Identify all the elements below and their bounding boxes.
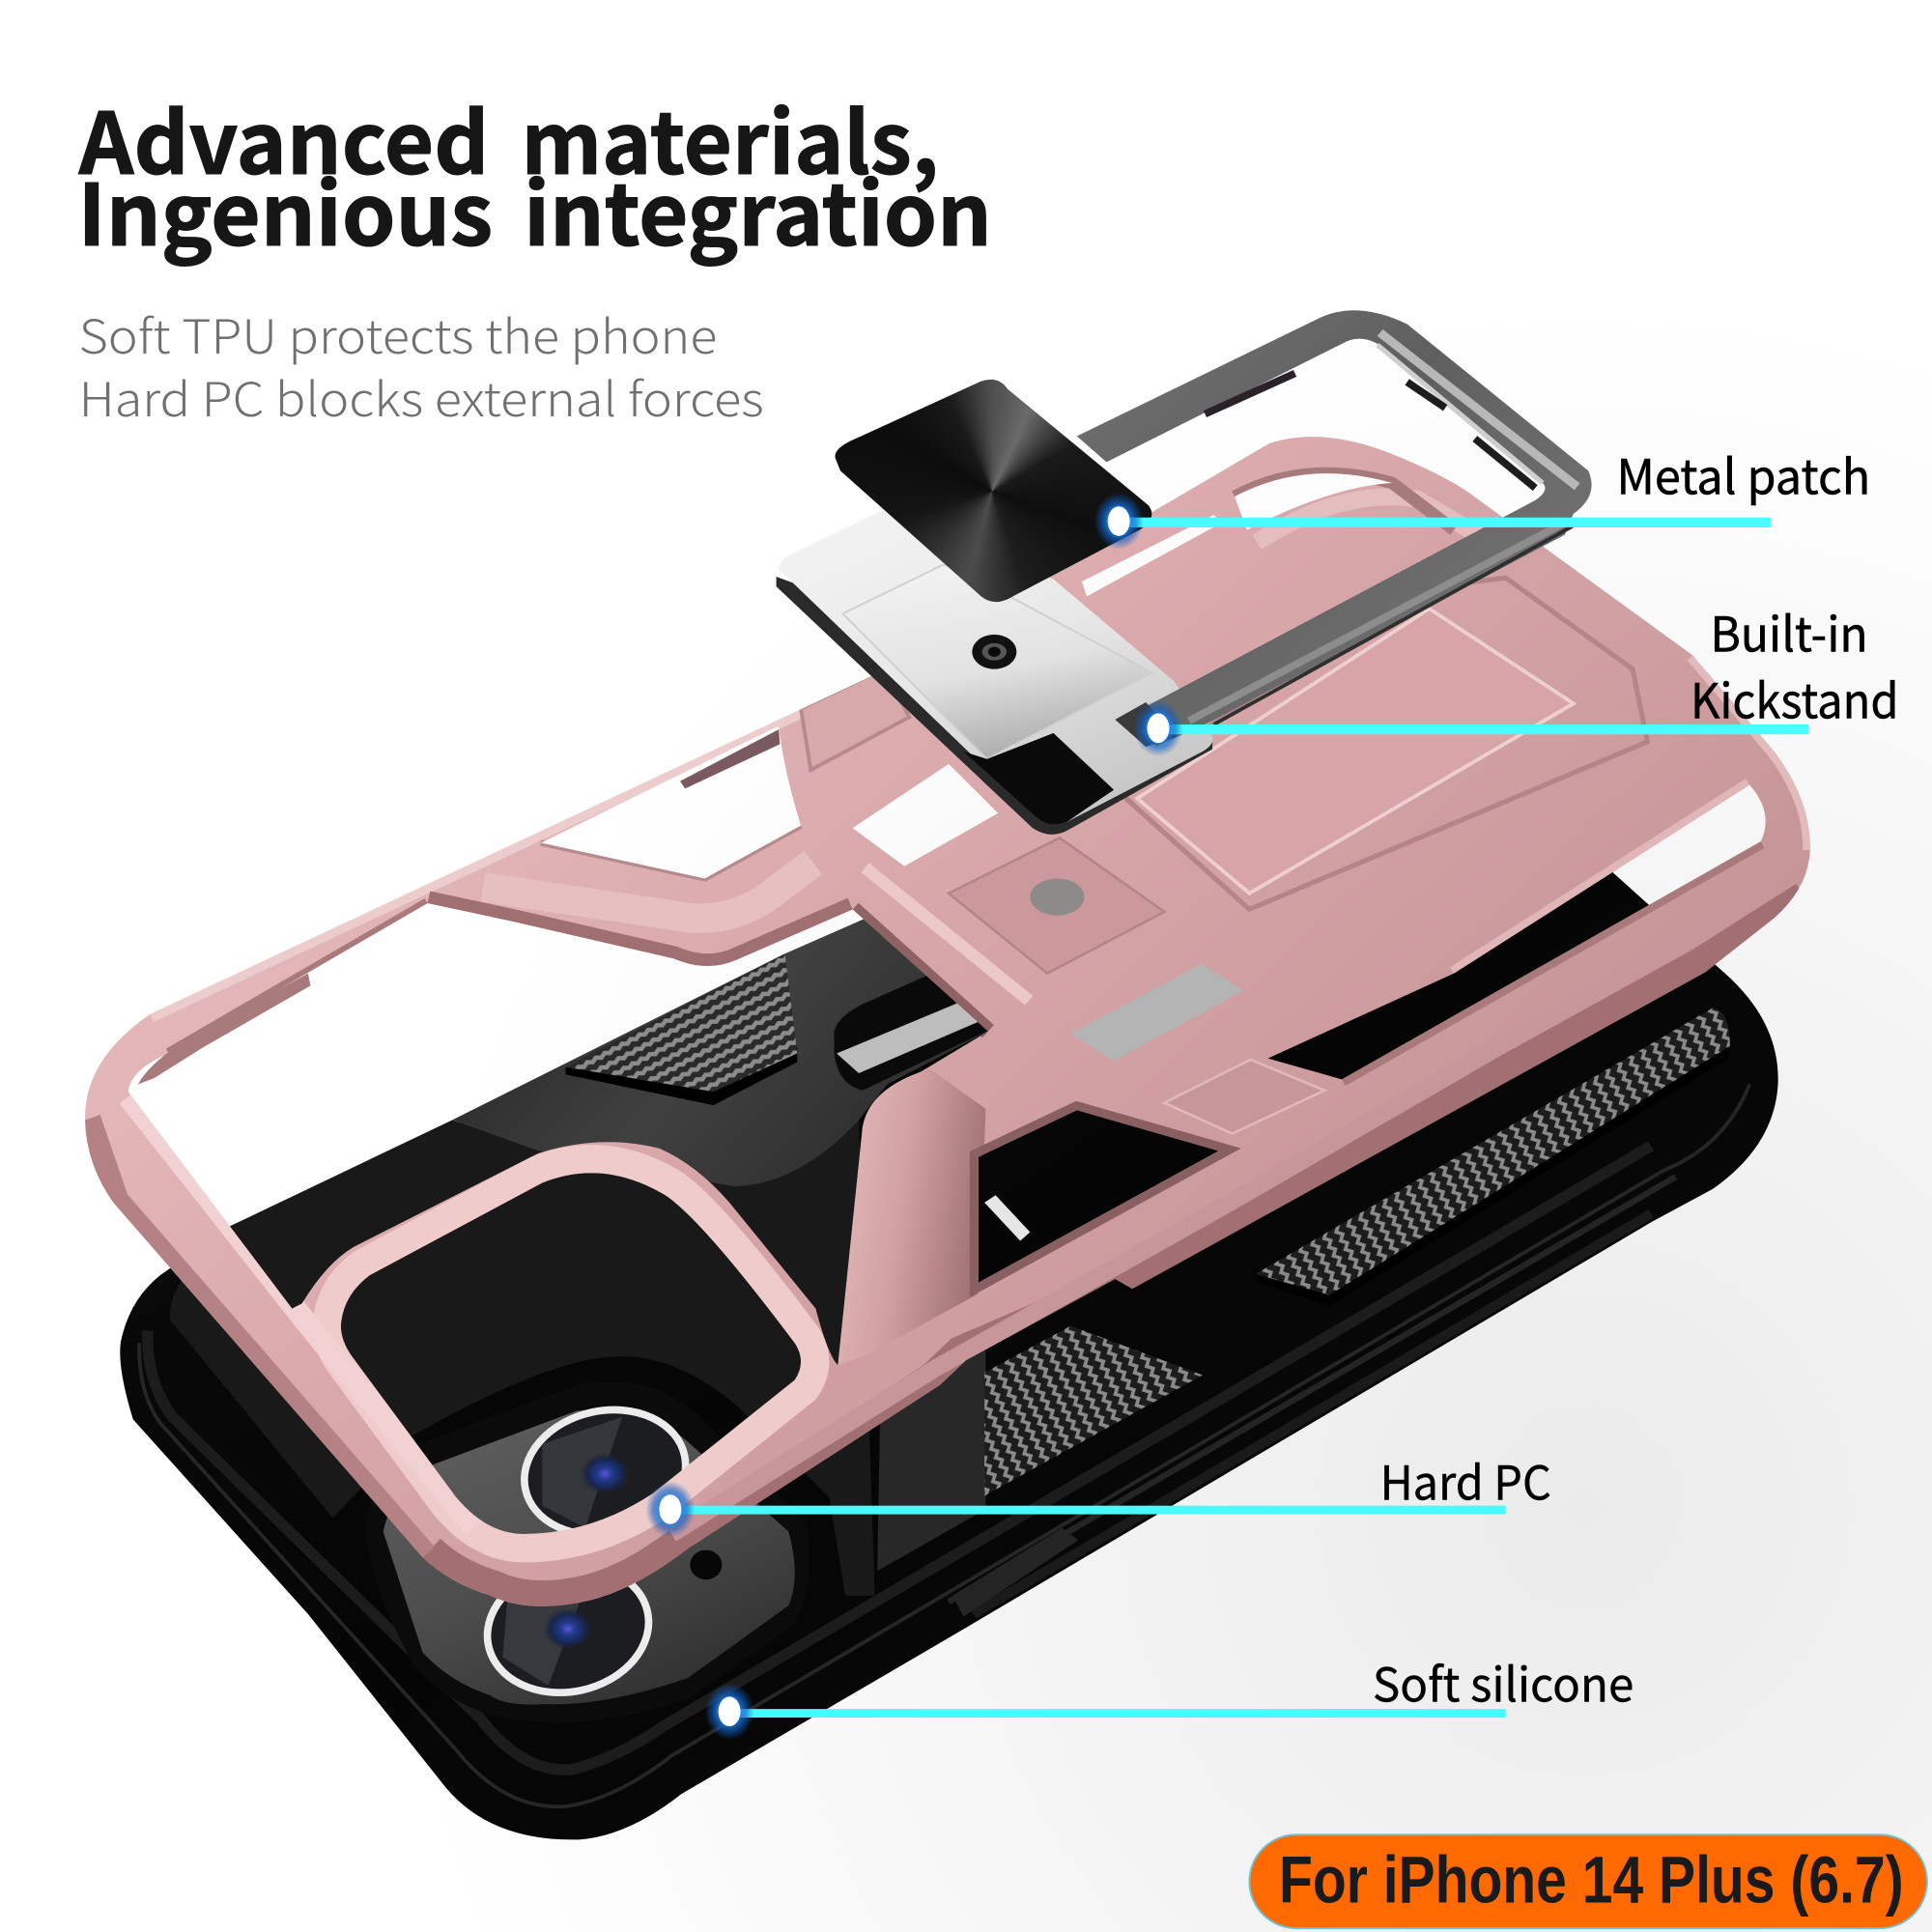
plate black reflection — [963, 733, 1114, 825]
arm socket — [1115, 702, 1177, 747]
metal patch — [835, 379, 1151, 603]
phone case: soft silicone black body — [120, 727, 1778, 1839]
frame lip: triangular opening — [680, 729, 780, 788]
square recess — [949, 838, 1164, 974]
frame shading — [85, 473, 1810, 1606]
title: materials, — [522, 76, 939, 199]
lower lens — [475, 1550, 661, 1707]
callout: soft silicone — [705, 1647, 1634, 1740]
subtitle — [79, 299, 764, 430]
center screw — [972, 635, 1016, 669]
title: Advanced — [78, 76, 489, 199]
kickstand recess — [1137, 609, 1574, 894]
carbon patch: triangle — [984, 1325, 1203, 1495]
gray reflection window — [1060, 949, 1257, 1072]
subtitle: Soft TPU protects the phone — [79, 299, 717, 367]
frame lip: top-left opening — [138, 974, 310, 1084]
flash hole — [690, 1550, 722, 1579]
white strip in window — [984, 1195, 1030, 1240]
callout: hard PC — [645, 1445, 1551, 1538]
callout: soft silicone: Soft silicone — [1373, 1647, 1634, 1715]
carbon patch: upper — [565, 953, 797, 1105]
camera module — [365, 1381, 810, 1722]
upper corner inner shade — [1235, 473, 1454, 529]
small raised tab upper — [801, 669, 909, 770]
kickstand metal frame — [1077, 310, 1592, 747]
callout: metal patch — [1094, 439, 1870, 550]
metal strip in slot — [837, 998, 982, 1073]
plate recess — [842, 565, 1152, 759]
title — [77, 76, 992, 270]
small raised tab lower — [1164, 1060, 1324, 1133]
plate edge — [777, 577, 1212, 835]
strut — [838, 1062, 985, 1365]
callout: built-in kickstand: Kickstand — [1690, 664, 1899, 733]
subtitle: Hard PC blocks external forces — [79, 362, 764, 430]
callout: hard PC: Hard PC — [1380, 1445, 1551, 1513]
pin hole — [1030, 878, 1084, 916]
kickstand slot — [835, 955, 1005, 1091]
title: integration — [524, 148, 992, 270]
side button — [952, 1528, 1078, 1616]
textured black back panel — [170, 1120, 875, 1596]
dark gray raised panel — [452, 887, 988, 1186]
magnetic plate — [777, 511, 1213, 835]
callout: built-in kickstand — [1133, 597, 1899, 756]
title: Ingenious — [77, 148, 493, 270]
carbon patch: long right — [1256, 1008, 1730, 1306]
upper lens — [513, 1395, 697, 1549]
pink hard PC frame — [85, 437, 1810, 1606]
callout: built-in kickstand: Built-in — [1710, 597, 1868, 667]
dark side panel — [877, 1306, 985, 1571]
callout: metal patch: Metal patch — [1616, 439, 1870, 508]
